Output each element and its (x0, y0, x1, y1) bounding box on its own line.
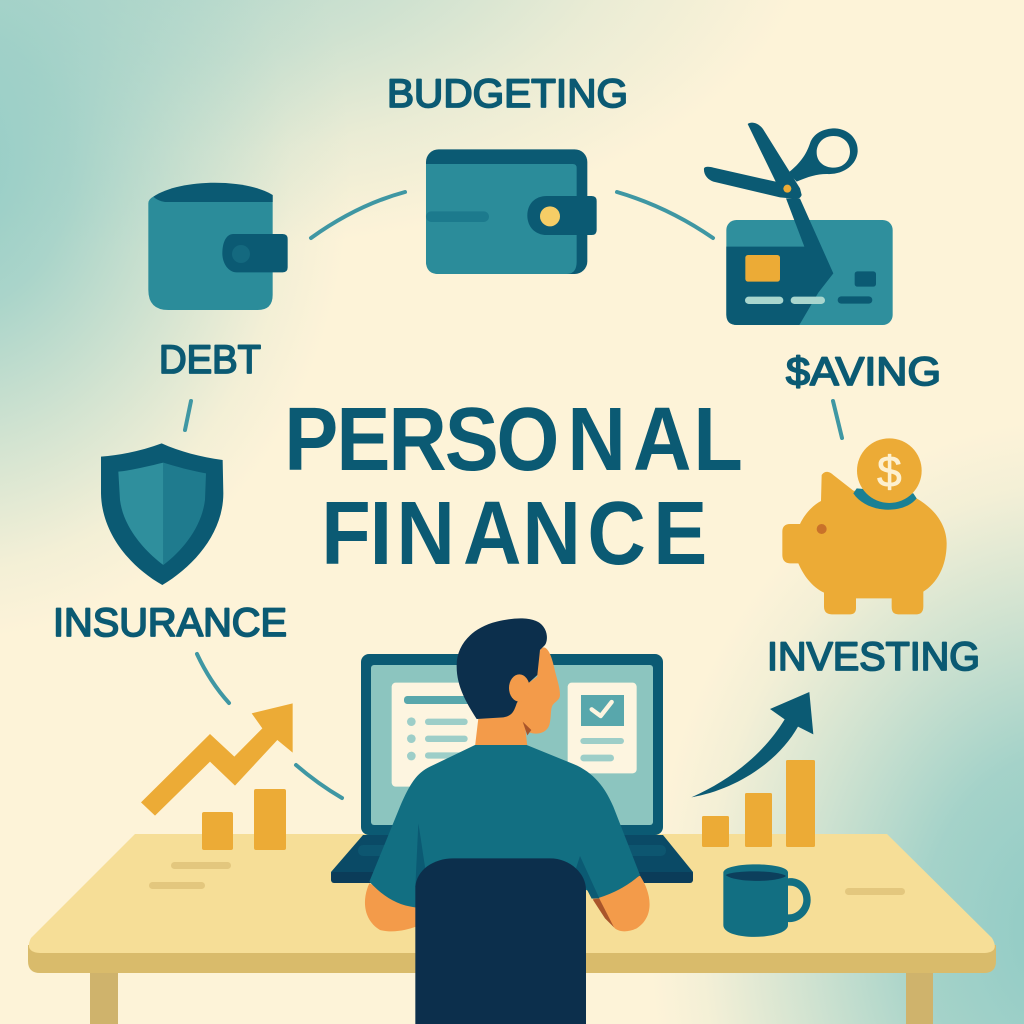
title: PERSONAL (284, 389, 743, 490)
chart: zigzag arrow with bars (141, 703, 293, 850)
icon: scissors cutting credit card (704, 123, 893, 325)
chart: rising arrow with bars (691, 692, 815, 847)
icon: budgeting wallet (426, 149, 597, 274)
screen contents (392, 683, 637, 787)
icon: desk (28, 834, 996, 1024)
icon: piggy bank with coin: $ (877, 448, 902, 497)
laptop (331, 654, 693, 883)
icon: shield (101, 443, 223, 585)
connector arcs (185, 192, 842, 798)
title: FINANCE (321, 483, 707, 584)
title (284, 389, 743, 584)
person seen from behind (365, 618, 650, 931)
label: insurance: INSURANCE (53, 601, 287, 645)
icon: piggy bank with coin (782, 438, 947, 614)
label: debt: DEBT (159, 338, 261, 382)
icon: debt wallet (148, 183, 288, 310)
icon: coffee mug (723, 864, 811, 937)
chair (415, 858, 586, 1024)
label: investing: INVESTING (767, 635, 980, 679)
label: budgeting: BUDGETING (387, 72, 628, 116)
label: saving: $AVING (786, 350, 941, 394)
